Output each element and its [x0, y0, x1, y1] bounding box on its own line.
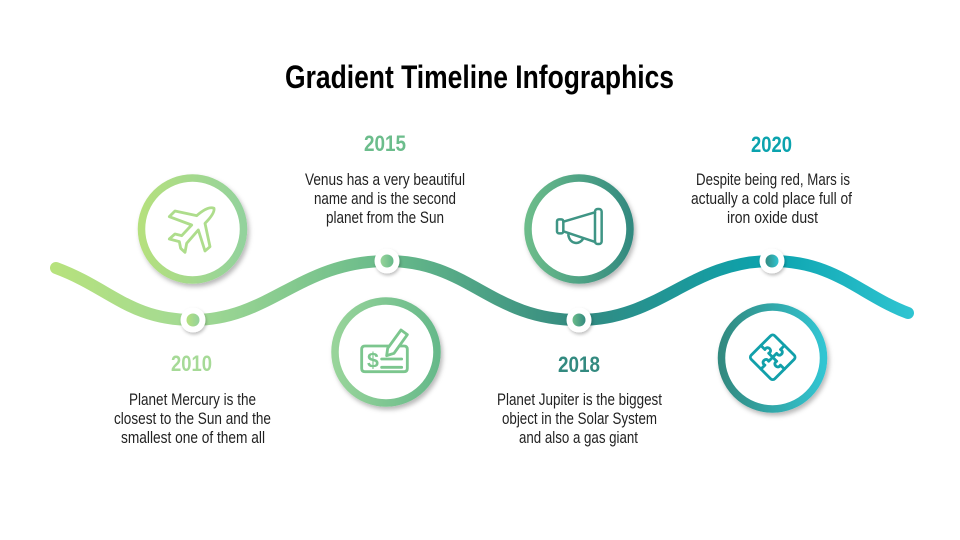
description 2010 — [114, 391, 271, 447]
description 2010: smallest one of them all — [121, 429, 265, 447]
year 2015: 2015 — [364, 131, 406, 156]
description 2020: iron oxide dust — [727, 209, 818, 227]
description 2018: and also a gas giant — [519, 429, 638, 447]
icon ring: plane — [142, 178, 244, 280]
icon: megaphone — [557, 209, 602, 244]
description 2015: Venus has a very beautiful — [305, 171, 465, 189]
timeline node 2010 — [180, 308, 206, 332]
icon ring: cheque — [335, 301, 437, 403]
description 2010: Planet Mercury is the — [129, 391, 256, 409]
description 2018: object in the Solar System — [502, 410, 657, 428]
panel: 2020 — [691, 132, 852, 409]
title: Gradient Timeline Infographics — [285, 59, 674, 95]
icon: airplane — [169, 208, 214, 252]
panel: 2015 — [305, 131, 465, 403]
description 2018: Planet Jupiter is the biggest — [497, 391, 662, 409]
panel: 2018 — [497, 178, 662, 447]
panel: 2010 — [114, 178, 271, 447]
timeline node 2015 — [374, 248, 400, 274]
description 2018 — [497, 391, 662, 447]
description 2015: name and is the second — [314, 190, 456, 208]
icon ring: megaphone — [528, 178, 630, 280]
description 2015 — [305, 171, 465, 227]
description 2020: Despite being red, Mars is — [696, 171, 850, 189]
year 2018: 2018 — [558, 352, 600, 377]
description 2010: closest to the Sun and the — [114, 410, 271, 428]
icon: cheque and pencil: $ — [367, 348, 379, 372]
icon: puzzle — [749, 334, 796, 381]
description 2020 — [691, 171, 852, 227]
year 2010: 2010 — [171, 351, 212, 376]
description 2020: actually a cold place full of — [691, 190, 852, 208]
icon ring: puzzle — [722, 307, 824, 409]
wavy timeline line — [56, 261, 908, 320]
timeline node 2018 — [566, 308, 592, 332]
description 2015: planet from the Sun — [326, 209, 444, 227]
year 2020: 2020 — [751, 132, 792, 157]
timeline node 2020 — [760, 248, 784, 274]
